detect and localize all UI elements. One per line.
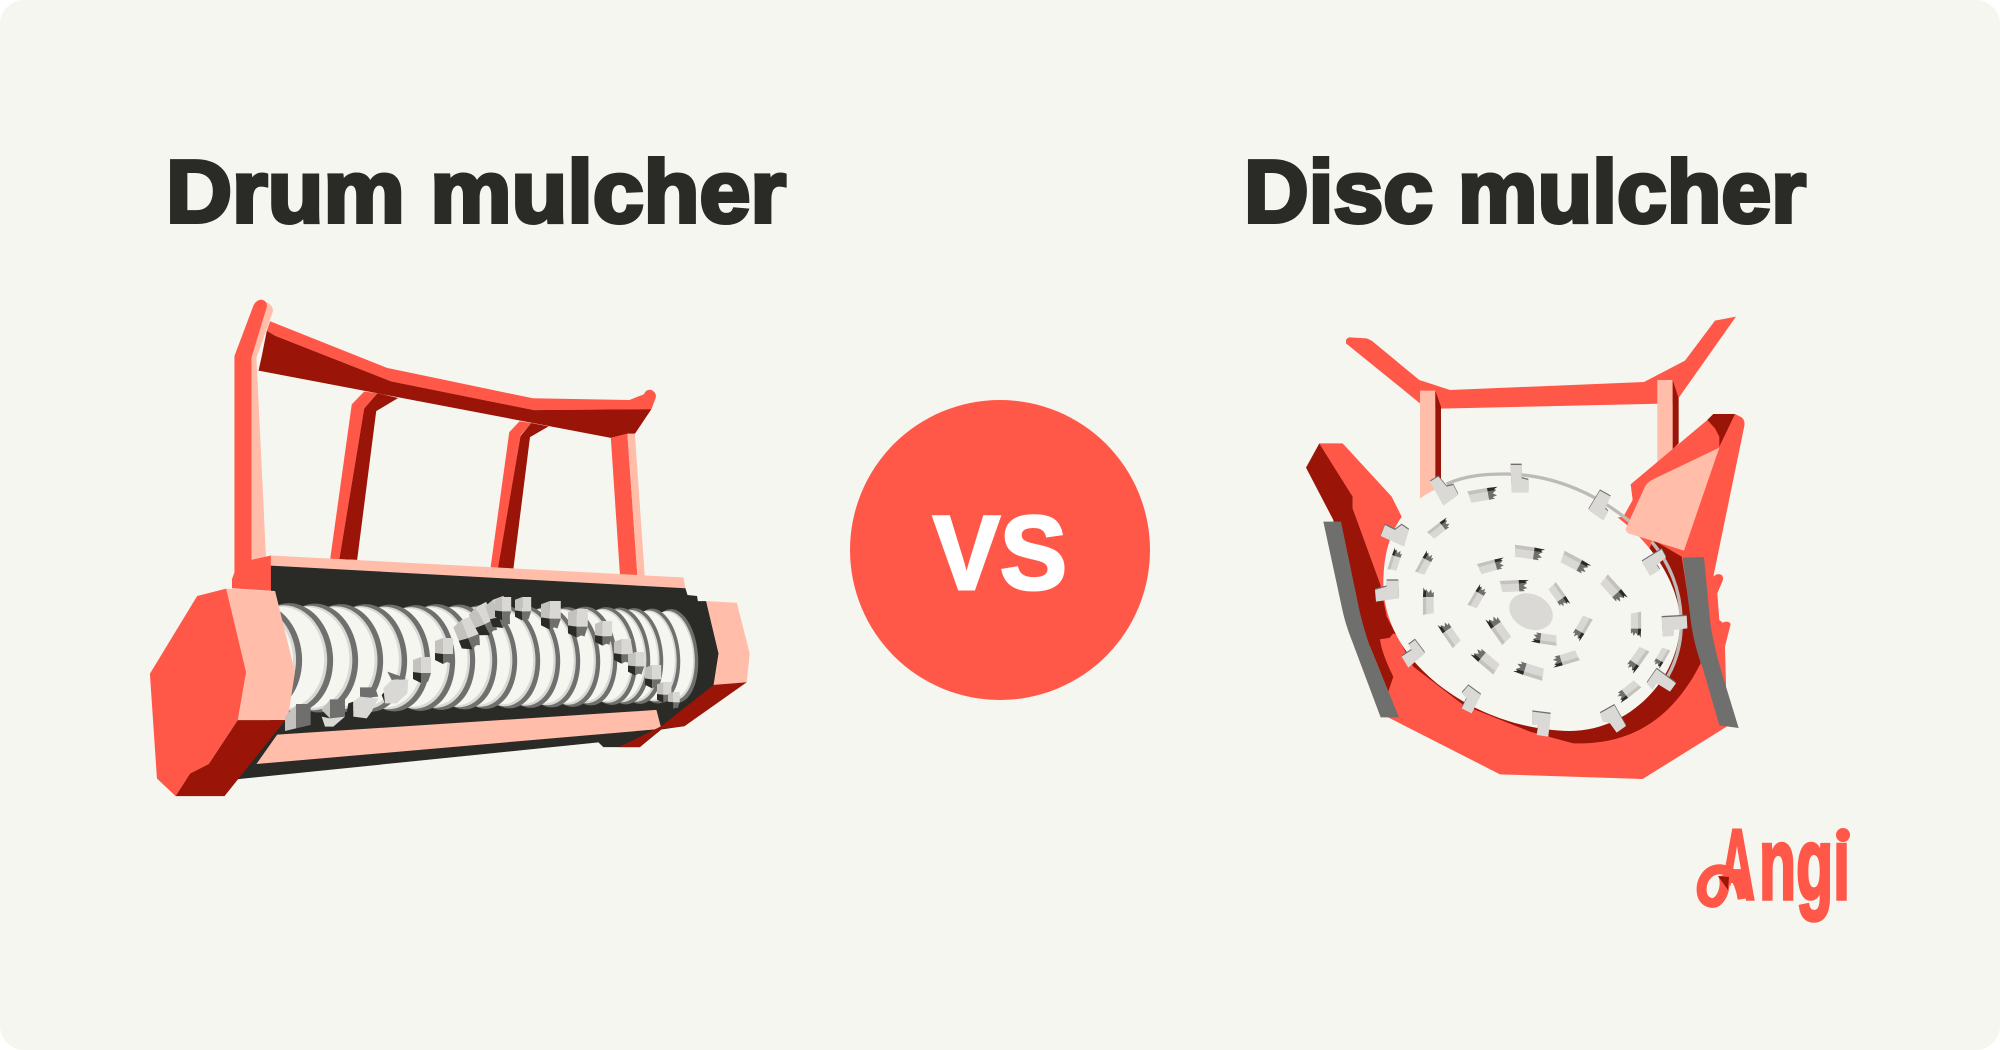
disc hub bbox=[1503, 586, 1559, 637]
frame posts bbox=[1420, 380, 1679, 517]
illustration: drum mulcher bbox=[150, 300, 750, 796]
upper frame bbox=[1346, 317, 1736, 409]
drum mulcher lower bar and end caps bbox=[150, 589, 750, 796]
VS badge: VS bbox=[933, 495, 1067, 612]
logo: Angi: A bbox=[1719, 809, 1755, 921]
drum teeth bbox=[322, 596, 680, 727]
title: Drum mulcher: Drum mulcher bbox=[166, 142, 786, 241]
drum with rings bbox=[202, 599, 702, 717]
VS badge bbox=[850, 400, 1150, 700]
disc face bbox=[1383, 475, 1680, 731]
logo: Angi: ngi bbox=[1759, 806, 1850, 921]
title: Disc mulcher: Disc mulcher bbox=[1244, 142, 1806, 241]
illustration: disc mulcher bbox=[1306, 317, 1745, 779]
outer teeth bbox=[1375, 464, 1687, 737]
peach guard bbox=[1626, 448, 1719, 551]
red housing bbox=[1306, 414, 1745, 779]
tooth over end cap bbox=[285, 704, 311, 731]
drum mulcher frame and housing bbox=[232, 300, 719, 780]
logo: Angi bbox=[1696, 828, 1850, 923]
disc rim bbox=[1447, 474, 1681, 683]
inner teeth bbox=[1387, 486, 1670, 703]
grey skids bbox=[1323, 522, 1739, 728]
